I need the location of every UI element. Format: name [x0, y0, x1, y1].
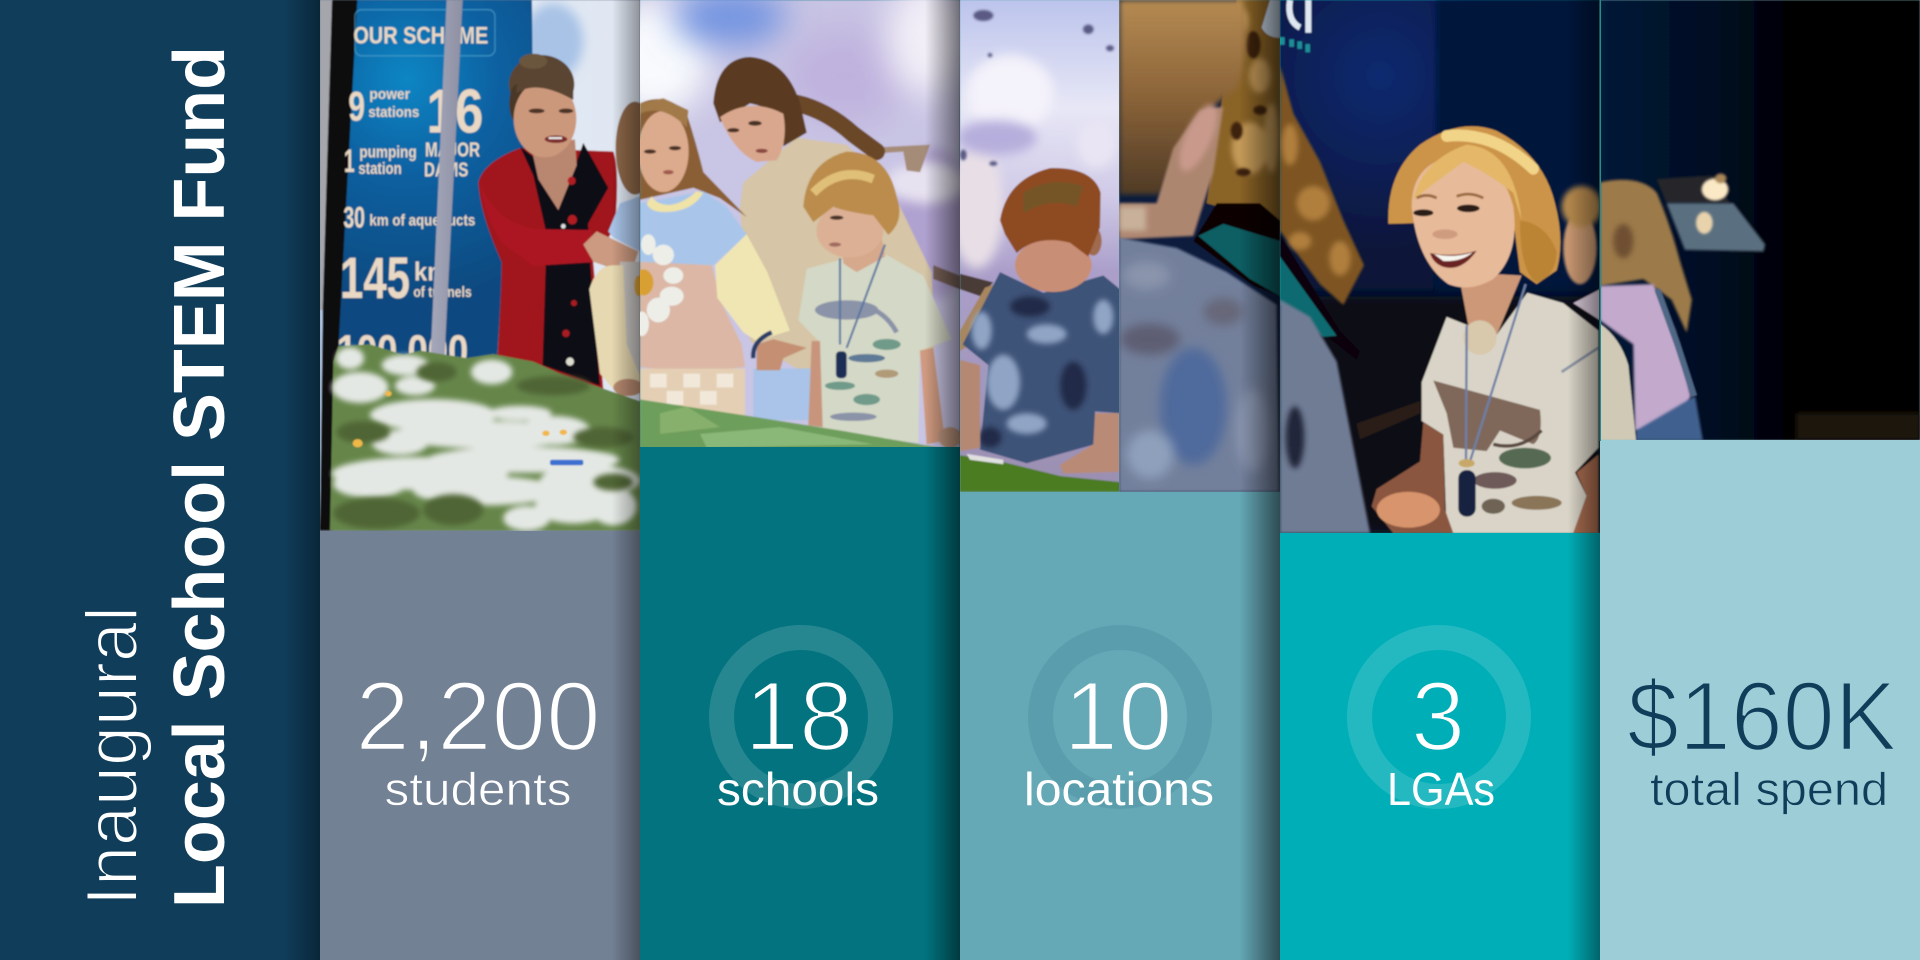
photo strip 1: educator and model landscape: stations — [368, 105, 419, 121]
photo strip 1: educator and model landscape: km — [414, 258, 448, 287]
stat: 3 LGAs — [1387, 661, 1495, 815]
panel: students background — [320, 0, 640, 960]
photo strip 1: educator and model landscape: DAMS — [424, 159, 468, 181]
photo strip 1: educator and model landscape: power — [369, 87, 410, 103]
photo strip 1: educator and model landscape: 100,000 — [337, 326, 468, 376]
photo strip 1: educator and model landscape: OUR SCHEME — [353, 23, 488, 49]
photo strip 1: educator and model landscape: 1 — [344, 143, 355, 179]
photo strip 4: smiling boy — [1280, 0, 1602, 533]
panel: title sidebar — [0, 0, 320, 960]
photo strip 1: educator and model landscape: 30 — [343, 202, 365, 234]
edge shadow: locations column — [1240, 0, 1280, 960]
stat: 2,200 students: students — [384, 763, 572, 815]
stat: $160K total spend: total spend — [1650, 763, 1888, 815]
stat: 10 locations — [1024, 661, 1214, 815]
photo strip 1: educator and model landscape — [320, 0, 654, 531]
photo strip 1: educator and model landscape: km of aqueducts — [369, 212, 476, 230]
ring: LGAs — [1360, 638, 1518, 796]
stat: 18 schools: 18 — [744, 661, 854, 771]
photo strip 3: boy in tie-dye shirt — [950, 0, 1120, 492]
panel: LGAs background — [1280, 0, 1600, 960]
ring: schools — [722, 638, 880, 796]
stat: $160K total spend: $160K — [1627, 661, 1897, 771]
divider line between photos 4 and 5 — [1599, 0, 1601, 441]
edge shadow: students column — [612, 0, 640, 960]
title line: Inaugural: Inaugural — [72, 606, 153, 906]
photo strip 1: educator and model landscape: MAJOR — [425, 139, 480, 162]
stat: 10 locations: locations — [1024, 763, 1214, 815]
photo strip 5: girl and display case in dark gallery — [1600, 0, 1920, 440]
title line: Local School STEM Fund: Local School STEM Fund — [160, 46, 240, 908]
photo strip 1: educator and model landscape: of tunnels — [413, 285, 472, 301]
photo strip 2: two girls and boy at the model — [640, 0, 960, 447]
stat: $160K total spend — [1627, 661, 1897, 815]
title: Inaugural Local School STEM Fund — [72, 46, 240, 908]
edge shadow: schools column — [925, 0, 960, 960]
panel: locations background — [960, 0, 1280, 960]
panel: total spend background — [1600, 0, 1920, 960]
edge shadow: sidebar — [285, 0, 320, 960]
stat: 2,200 students: 2,200 — [355, 661, 601, 771]
edge shadow: LGAs column — [1568, 0, 1600, 960]
photo strip 1: educator and model landscape: 145 — [340, 246, 410, 311]
photo strip 1: educator and model landscape: station — [358, 160, 402, 178]
photo strip 1: educator and model landscape: pumping — [359, 144, 417, 162]
panel: schools background — [640, 0, 960, 960]
stat: 18 schools: schools — [717, 763, 879, 815]
stat: 10 locations: 10 — [1063, 661, 1173, 771]
stat: 18 schools — [717, 661, 879, 815]
stat: 3 LGAs: 3 — [1411, 661, 1465, 771]
photo strip 1: educator and model landscape: 16 — [427, 77, 483, 146]
ring: locations — [1040, 638, 1200, 796]
stat: 3 LGAs: LGAs — [1387, 763, 1495, 815]
photo strip 1: educator and model landscape: 9 — [348, 83, 365, 130]
photo strip 3b: blurred boy seen from behind — [1119, 0, 1280, 492]
